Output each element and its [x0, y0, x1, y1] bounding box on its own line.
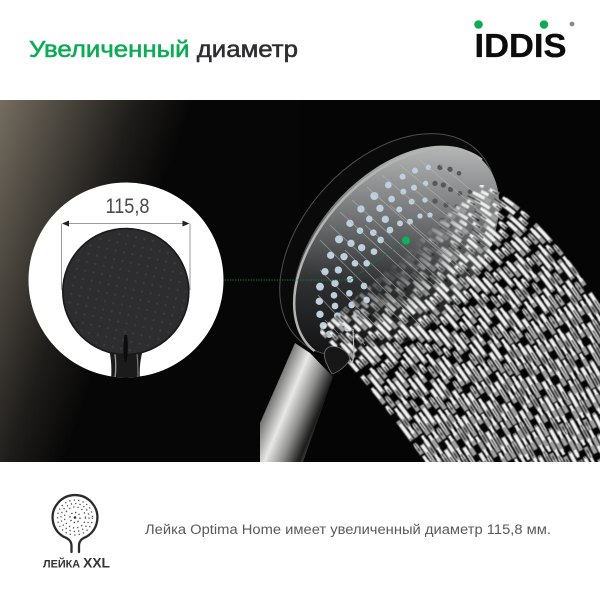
water streams — [320, 185, 600, 480]
switch lever on shower head — [324, 329, 354, 374]
title: Увеличенный диаметр — [29, 36, 298, 62]
head handle in detail view — [110, 353, 142, 378]
dimension value: 115,8 — [106, 195, 150, 218]
photo panel: shower head with water — [0, 92, 600, 480]
shower handle — [260, 343, 333, 462]
thin jets leaving the nozzles — [318, 160, 490, 345]
callout circle: diameter detail — [28, 182, 224, 380]
callout line: dotted leader to green marker — [222, 236, 410, 280]
shower head front view — [63, 228, 189, 363]
logo: IDDIS: IDDIS — [474, 27, 566, 64]
shower head body — [279, 133, 500, 358]
dimension lines with arrows — [62, 220, 190, 290]
description text: Лейка Optima Home имеет увеличенный диаметр 115,8 мм. — [145, 522, 551, 537]
icon: XXL shower head — [53, 495, 97, 552]
icon label: ЛЕЙКА XXL — [43, 554, 110, 570]
nozzles on shower face — [316, 165, 475, 338]
